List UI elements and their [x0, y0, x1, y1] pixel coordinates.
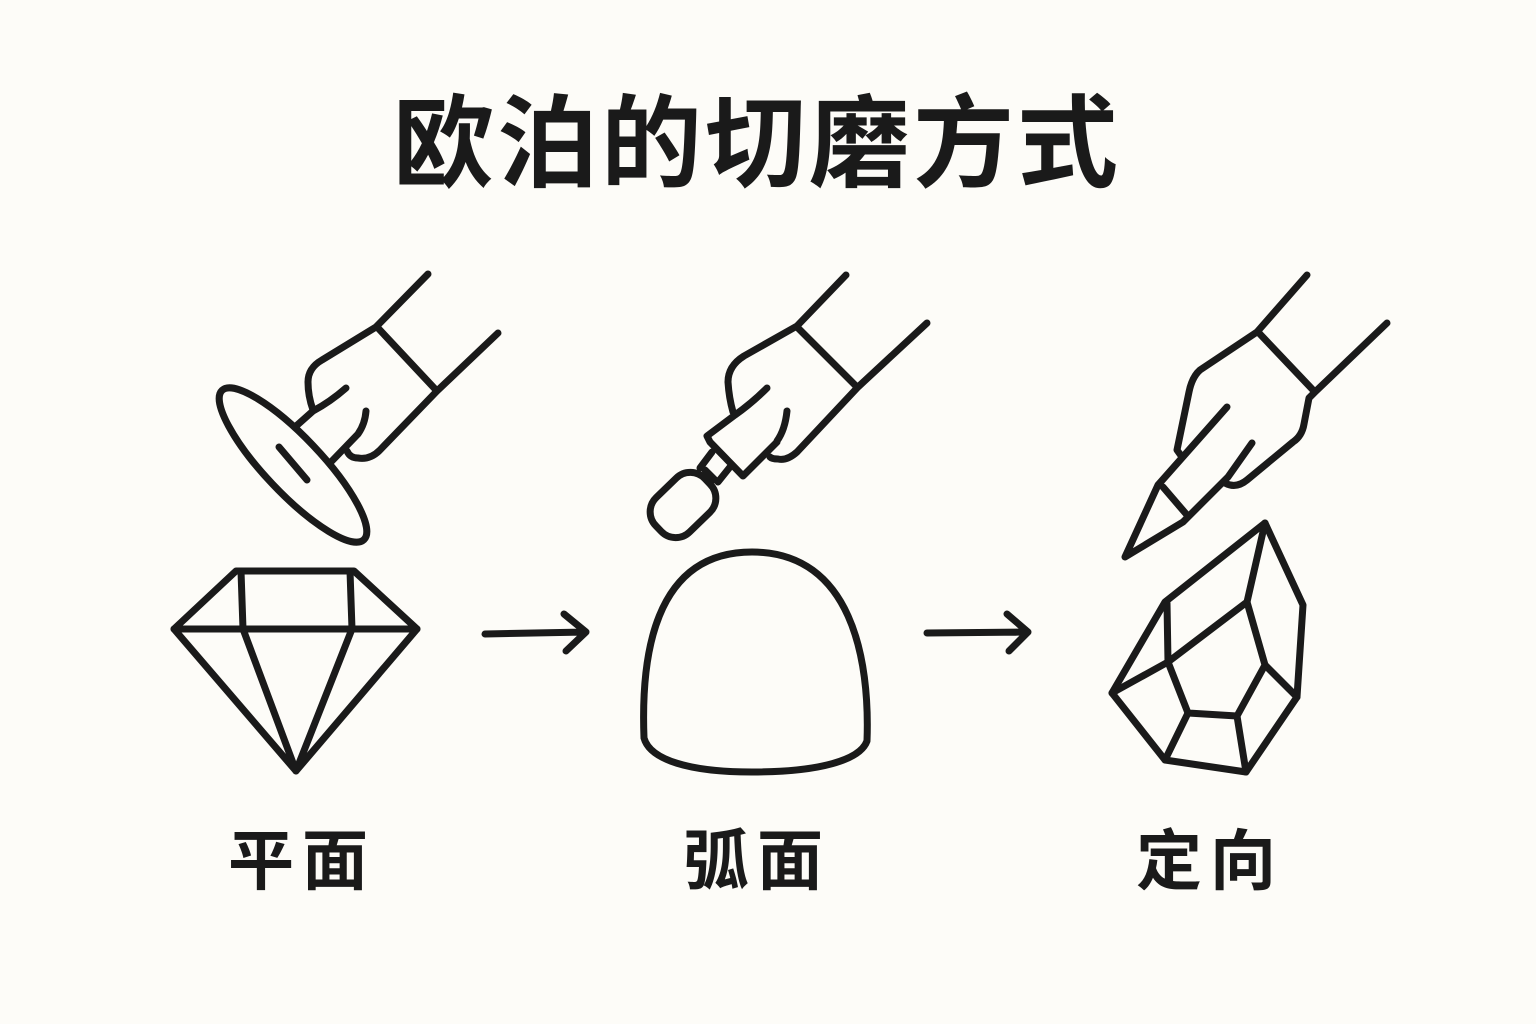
label: oriented: 定向: [1136, 824, 1284, 898]
title: 欧泊的切磨方式: [393, 89, 1121, 201]
icon: hand holding pointed tool: [1125, 275, 1387, 557]
arrow: flat to cabochon: [485, 614, 586, 651]
label: flat: 平面: [228, 824, 376, 898]
icon: flat cut diamond: [174, 571, 417, 771]
label: cabochon: 弧面: [683, 824, 831, 898]
icon: oriented faceted gem: [1112, 523, 1303, 772]
arrow: cabochon to faceted: [927, 614, 1028, 651]
icon: hand holding cabochon tool: [642, 275, 927, 546]
icon: hand holding flat grinding disc: [202, 274, 498, 559]
icon: cabochon dome: [644, 552, 867, 772]
